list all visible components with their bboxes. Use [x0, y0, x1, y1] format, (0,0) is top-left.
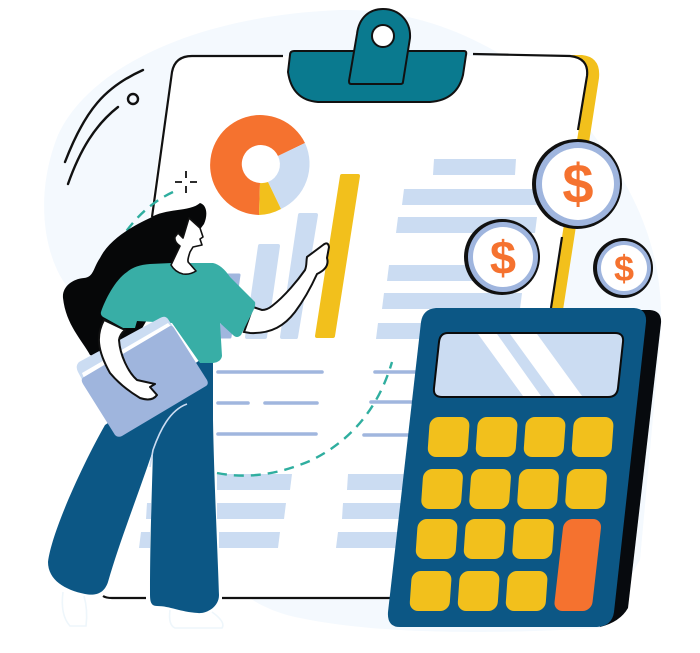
right text bars — [376, 159, 540, 339]
clipboard board — [100, 54, 599, 598]
light blue segment — [268, 143, 310, 209]
bar 3 — [282, 215, 316, 337]
highlighted yellow bar — [317, 176, 358, 336]
dashed trend line — [217, 362, 392, 476]
calculator body — [388, 308, 646, 627]
dashed arc — [125, 192, 173, 233]
orange segment — [210, 115, 305, 215]
clipboard clip — [288, 9, 466, 102]
teal shirt — [101, 263, 255, 363]
bar 2 — [247, 246, 278, 337]
lower text bars — [139, 474, 420, 548]
calculator side shadow — [600, 310, 661, 627]
clip hole — [372, 25, 394, 47]
face and neck — [171, 218, 203, 274]
coin: large: $ — [562, 152, 594, 215]
coin: small: $ — [614, 248, 634, 289]
white sheet — [100, 56, 587, 598]
hair — [63, 203, 206, 362]
donut chart — [210, 115, 310, 215]
yellow segment — [259, 182, 281, 215]
report lines — [218, 372, 416, 435]
trouser crease — [150, 404, 187, 467]
coin: medium: $ — [490, 231, 516, 284]
decorative arcs — [65, 70, 143, 184]
holding arm — [99, 320, 157, 399]
coin: medium — [464, 219, 540, 295]
trousers — [48, 360, 219, 613]
yellow keypad — [409, 417, 614, 611]
calculator screen — [434, 333, 623, 397]
bar 1 — [220, 275, 239, 337]
orange key — [554, 519, 602, 611]
clip tab — [349, 9, 410, 84]
coin: large — [532, 139, 622, 229]
board outline — [103, 54, 587, 598]
pointing arm — [244, 243, 329, 333]
shoes — [62, 592, 223, 628]
bar chart — [220, 176, 358, 337]
woman figure — [48, 203, 329, 628]
calculator — [388, 308, 661, 627]
folder — [77, 317, 208, 437]
yellow board edge — [545, 55, 599, 310]
clip base — [288, 51, 466, 102]
sparkle — [175, 171, 197, 193]
coin: small — [593, 238, 653, 298]
screen glare — [478, 334, 582, 396]
